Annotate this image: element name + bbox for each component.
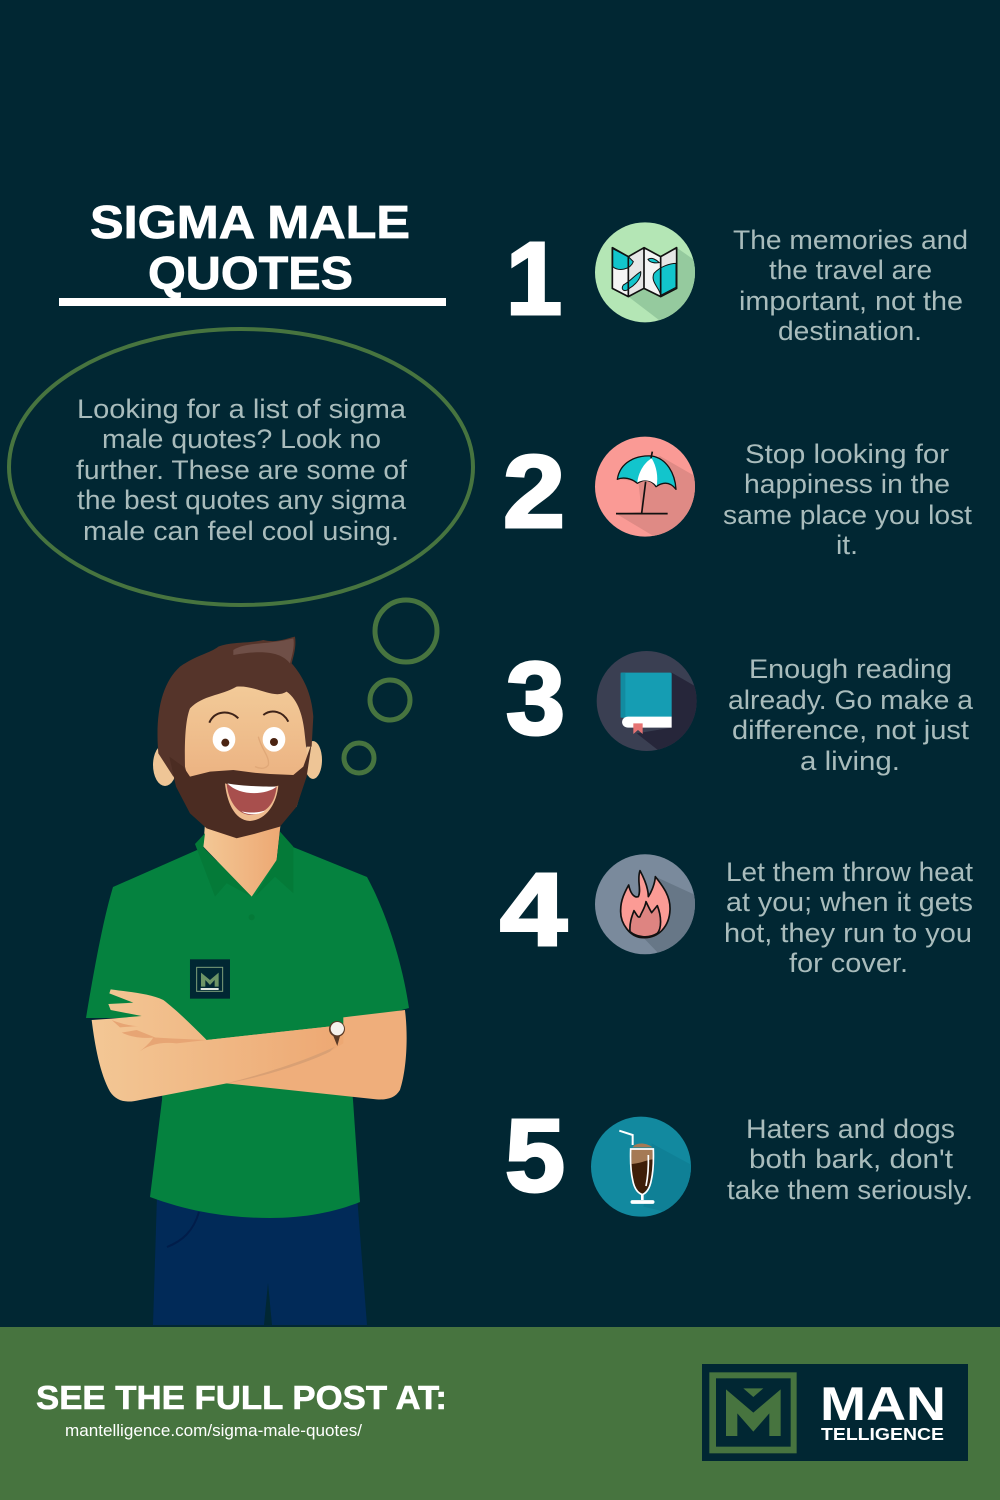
thought bubble with intro text: the best quotes any sigma bbox=[77, 485, 406, 515]
quote 4 bbox=[500, 852, 974, 978]
quote text 3: a living. bbox=[800, 746, 900, 776]
thought bubble with intro text: Looking for a list of sigma bbox=[77, 394, 406, 424]
number 1: 1 bbox=[506, 221, 562, 336]
icon: beach umbrella bbox=[595, 436, 695, 537]
quote text 5: take them seriously. bbox=[727, 1175, 973, 1205]
number 3: 3 bbox=[506, 641, 565, 756]
thought bubble circles bbox=[344, 600, 437, 773]
quote text 3: difference, not just bbox=[732, 715, 970, 745]
mouth bbox=[225, 783, 278, 821]
ears bbox=[153, 741, 322, 786]
logo bbox=[702, 1364, 968, 1461]
logo wordmark: MAN bbox=[820, 1377, 946, 1430]
icon: flame bbox=[595, 854, 695, 954]
title: QUOTES bbox=[148, 247, 353, 299]
green shirt bbox=[86, 847, 409, 1218]
quote 1 bbox=[506, 221, 968, 346]
trousers bbox=[153, 1195, 367, 1325]
quote text 5: both bark, don't bbox=[749, 1144, 954, 1174]
crossed arms bbox=[92, 989, 407, 1102]
quote text 1: important, not the bbox=[739, 286, 963, 316]
quote 5 bbox=[506, 1116, 970, 1217]
quote 3 bbox=[506, 641, 973, 776]
quote text 5 bbox=[727, 1114, 973, 1205]
thought bubble with intro text: male quotes? Look no bbox=[102, 424, 381, 454]
number 2: 2 bbox=[503, 434, 565, 549]
quote text 3: Enough reading bbox=[749, 654, 952, 684]
logo mark bbox=[709, 1372, 797, 1453]
quote text 1 bbox=[733, 225, 968, 346]
thought bubble with intro text: male can feel cool using. bbox=[83, 516, 399, 546]
quote text 2: Stop looking for bbox=[745, 439, 949, 469]
thought bubble with intro text: further. These are some of bbox=[76, 455, 408, 485]
eyes bbox=[213, 727, 235, 752]
quote text 5: Haters and dogs bbox=[746, 1114, 955, 1144]
quote text 4 bbox=[724, 857, 974, 978]
thought bubble with intro text bbox=[9, 329, 473, 605]
footer band bbox=[0, 1327, 1000, 1500]
title: SIGMA MALE bbox=[90, 196, 410, 248]
quote text 4: at you; when it gets bbox=[726, 887, 973, 917]
quote text 2: same place you lost bbox=[723, 500, 973, 530]
neck and collar bbox=[195, 823, 293, 920]
quote text 2: happiness in the bbox=[744, 469, 950, 499]
quote text 3: already. Go make a bbox=[728, 685, 973, 715]
character illustration bbox=[86, 637, 409, 1325]
footer url: mantelligence.com/sigma-male-quotes/ bbox=[65, 1421, 362, 1440]
eyebrows bbox=[209, 712, 288, 723]
quote text 2: it. bbox=[836, 530, 858, 560]
quote text 4: Let them throw heat bbox=[726, 857, 974, 887]
quote text 4: for cover. bbox=[789, 948, 908, 978]
icon: milkshake bbox=[591, 1116, 691, 1217]
hair and face bbox=[158, 637, 313, 838]
quote text 1: The memories and bbox=[733, 225, 968, 255]
quote text 1: destination. bbox=[778, 316, 922, 346]
quote text 4: hot, they run to you bbox=[724, 918, 972, 948]
beard bbox=[169, 743, 312, 838]
logo: TELLIGENCE bbox=[821, 1424, 944, 1444]
shirt badge bbox=[190, 959, 230, 999]
quote 2 bbox=[503, 434, 973, 560]
nose bbox=[255, 737, 269, 768]
watch bbox=[333, 1036, 340, 1046]
title bbox=[59, 196, 446, 306]
quote text 1: the travel are bbox=[769, 255, 932, 285]
number 4: 4 bbox=[500, 852, 567, 967]
icon: book bbox=[596, 651, 697, 751]
footer call to action: SEE THE FULL POST AT: bbox=[36, 1379, 447, 1416]
quote text 2 bbox=[723, 439, 973, 560]
number 5: 5 bbox=[505, 1098, 565, 1213]
icon: map bbox=[595, 222, 695, 322]
quote text 3 bbox=[728, 654, 973, 776]
